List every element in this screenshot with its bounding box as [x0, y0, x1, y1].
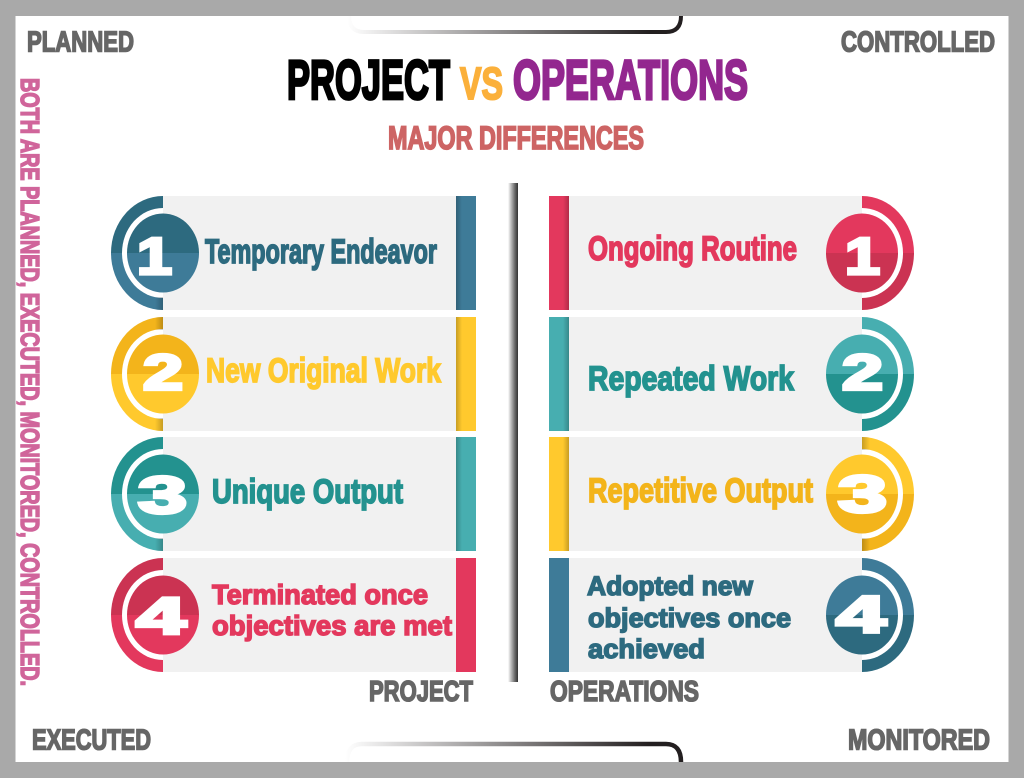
title: [287, 48, 748, 111]
operations row 2: Repeated Work: [588, 360, 794, 398]
title: PROJECT: [287, 48, 450, 111]
operations row 4: 4: [836, 586, 886, 644]
project row 2: 2: [143, 344, 183, 400]
operations row 1: [549, 196, 914, 310]
corner label: executed: EXECUTED: [32, 724, 151, 756]
project row 2: New Original Work: [206, 352, 441, 390]
title: VS: [460, 58, 503, 109]
title: OPERATIONS: [513, 48, 748, 111]
center divider: [508, 183, 518, 682]
project row 1: 1: [137, 228, 172, 286]
operations row 4: Adopted new: [587, 571, 754, 601]
operations row 2: [549, 317, 914, 431]
operations row 1: 1: [845, 228, 880, 286]
top bracket: [349, 16, 681, 32]
project row 4: objectives are met: [212, 610, 452, 641]
column label: project: PROJECT: [369, 676, 473, 708]
project row 4: [111, 558, 476, 672]
project row 3: Unique Output: [212, 473, 403, 511]
project row 1: [111, 196, 476, 310]
panel: operations column: [549, 196, 914, 672]
column label: operations: OPERATIONS: [550, 676, 699, 708]
operations row 1: Ongoing Routine: [588, 230, 797, 268]
corner label: monitored: MONITORED: [848, 724, 990, 756]
project row 4: 4: [136, 588, 186, 646]
operations row 4: achieved: [588, 634, 705, 664]
subtitle: MAJOR DIFFERENCES: [388, 120, 644, 156]
operations row 3: 3: [838, 466, 887, 524]
operations row 2: 2: [842, 344, 883, 400]
project row 1: Temporary Endeavor: [205, 233, 437, 271]
project row 2: [111, 317, 476, 431]
corner label: planned: PLANNED: [27, 26, 134, 58]
operations row 4: [549, 558, 914, 672]
bottom bracket: [347, 744, 681, 762]
operations row 3: [549, 437, 914, 551]
project row 4: Terminated once: [212, 579, 428, 610]
panel: project column: [111, 196, 476, 672]
operations row 4: objectives once: [588, 603, 791, 633]
project row 3: 3: [138, 467, 187, 525]
project row 3: [111, 437, 476, 551]
operations row 3: Repetitive Output: [588, 472, 813, 510]
